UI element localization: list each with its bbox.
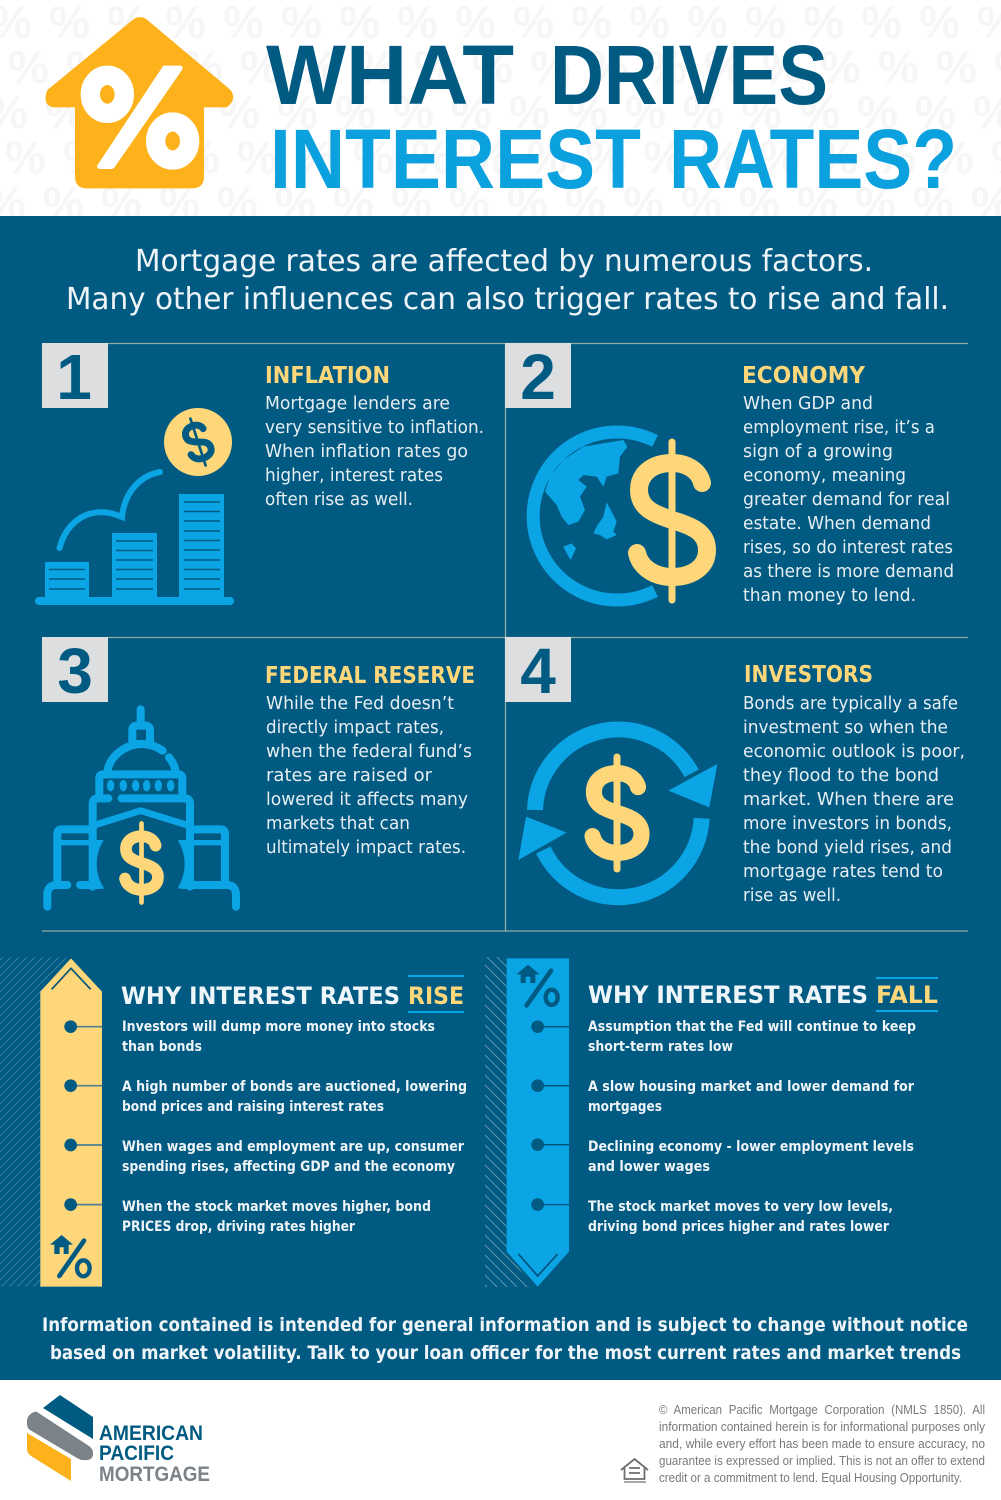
logo: American Pacific Mortgage: AMERICAN — [99, 1422, 203, 1445]
text: economy: as there is more demand — [743, 562, 954, 582]
number badge 2 — [505, 341, 571, 413]
heading: federal reserve: FEDERAL RESERVE — [265, 663, 475, 689]
text: economy: estate. When demand — [743, 514, 931, 534]
heading: why rates rise — [121, 976, 464, 1012]
text: economy: employment rise, it’s a — [743, 418, 935, 438]
text: federal reserve: lowered it affects many — [266, 790, 468, 810]
down arrow — [507, 958, 569, 1287]
panel: 1 inflation — [35, 341, 484, 605]
list: reasons rates rise: Investors will dump more money into stocks — [122, 1019, 435, 1035]
title: DRIVES — [550, 28, 828, 122]
logo: American Pacific Mortgage: MORTGAGE — [99, 1463, 210, 1486]
text: inflation: very sensitive to inflation. — [265, 418, 484, 438]
list: reasons rates rise: bond prices and raising interest rates — [122, 1099, 384, 1115]
text: inflation: higher, interest rates — [265, 466, 443, 486]
text: investors — [743, 694, 965, 906]
text: economy: sign of a growing — [743, 442, 893, 462]
title: RATES? — [669, 112, 957, 206]
panel: why rates rise — [0, 957, 467, 1287]
text: investors: economic outlook is poor, — [743, 742, 965, 762]
list: reasons rates fall: The stock market moves to very low levels, — [588, 1199, 893, 1215]
list: reasons rates fall: and lower wages — [588, 1159, 710, 1175]
icon: circular arrows with dollar — [518, 729, 717, 897]
text: economy: greater demand for real — [743, 490, 950, 510]
icon: globe with dollar — [533, 432, 707, 600]
number badge 3 — [42, 635, 108, 707]
text: investors: investment so when the — [743, 718, 948, 738]
text: federal reserve: ultimately impact rates. — [266, 838, 466, 858]
list: reasons rates rise: than bonds — [122, 1039, 202, 1055]
intro text — [66, 244, 949, 317]
text: federal reserve — [266, 694, 472, 858]
text: federal reserve: when the federal fund’s — [266, 742, 472, 762]
legal disclaimer — [659, 1402, 985, 1485]
number badge 1: 1 — [56, 341, 92, 413]
list: reasons rates fall — [588, 1019, 916, 1235]
panel: why rates fall — [485, 957, 938, 1287]
text: investors: rise as well. — [743, 886, 841, 906]
heading: why rates fall: WHY INTEREST RATES — [588, 981, 868, 1009]
text: economy: rises, so do interest rates — [743, 538, 953, 558]
text: economy: When GDP and — [743, 394, 873, 414]
text: inflation — [265, 394, 484, 510]
icon: equal housing — [621, 1459, 648, 1483]
text: inflation: When inflation rates go — [265, 442, 468, 462]
text: investors: market. When there are — [743, 790, 954, 810]
text: investors: the bond yield rises, and — [743, 838, 952, 858]
number badge 2: 2 — [520, 341, 556, 413]
text: inflation: often rise as well. — [265, 490, 413, 510]
icon: capitol with dollar — [47, 709, 236, 908]
number badge 4: 4 — [520, 635, 556, 707]
main navy panel — [0, 216, 1001, 1380]
list: reasons rates rise: A high number of bonds are auctioned, lowering — [122, 1079, 467, 1095]
text: inflation: Mortgage lenders are — [265, 394, 450, 414]
heading: investors: INVESTORS — [744, 662, 873, 688]
list: reasons rates rise: When wages and employment are up, consumer — [122, 1139, 465, 1155]
text: investors: Bonds are typically a safe — [743, 694, 958, 714]
text: federal reserve: rates are raised or — [266, 766, 433, 786]
text: federal reserve: While the Fed doesn’t — [266, 694, 454, 714]
legal disclaimer: credit or a commitment to lend. Equal Housing Opportunity. — [659, 1470, 962, 1485]
list: reasons rates rise: spending rises, affecting GDP and the economy — [122, 1159, 455, 1175]
panel: 2 economy — [505, 341, 954, 606]
heading: inflation: INFLATION — [265, 363, 390, 389]
logo: American Pacific Mortgage — [27, 1395, 210, 1486]
text: federal reserve: markets that can — [266, 814, 410, 834]
heading: why rates rise: WHY INTEREST RATES — [121, 982, 400, 1010]
heading: why rates fall: FALL — [876, 981, 938, 1009]
number badge 3: 3 — [57, 635, 93, 707]
logo: American Pacific Mortgage: PACIFIC — [99, 1442, 174, 1465]
heading: economy: ECONOMY — [742, 363, 865, 389]
list: reasons rates fall: mortgages — [588, 1099, 662, 1115]
text: federal reserve: directly impact rates, — [266, 718, 444, 738]
up arrow — [40, 958, 102, 1287]
icon: bar chart with coin — [35, 408, 234, 605]
title: INTEREST — [270, 112, 641, 206]
number badge 4 — [505, 635, 571, 707]
text: investors: more investors in bonds, — [743, 814, 952, 834]
list: reasons rates rise: When the stock market moves higher, bond — [122, 1199, 431, 1215]
panel: 4 investors — [505, 635, 965, 906]
text: investors: mortgage rates tend to — [743, 862, 943, 882]
intro text: Mortgage rates are affected by numerous factors. — [135, 244, 873, 279]
list: reasons rates rise: PRICES drop, driving rates higher — [122, 1219, 356, 1235]
icon: house with percent sign — [45, 17, 233, 188]
list: reasons rates fall: Assumption that the Fed will continue to keep — [588, 1019, 916, 1035]
text: investors: they flood to the bond — [743, 766, 939, 786]
list: reasons rates fall: driving bond prices higher and rates lower — [588, 1219, 890, 1235]
text: economy: than money to lend. — [743, 586, 916, 606]
intro text: Many other influences can also trigger rates to rise and fall. — [66, 282, 949, 317]
number badge 1 — [42, 341, 108, 413]
text: economy — [743, 394, 954, 606]
heading: why rates rise: RISE — [408, 982, 464, 1010]
list: reasons rates fall: A slow housing market and lower demand for — [588, 1079, 915, 1095]
text: economy: economy, meaning — [743, 466, 906, 486]
list: reasons rates fall: Declining economy - lower employment levels — [588, 1139, 914, 1155]
title: WHAT — [266, 28, 514, 122]
list: reasons rates rise — [122, 1019, 467, 1235]
footer note — [42, 1314, 968, 1364]
title — [266, 28, 957, 206]
panel: 3 federal reserve — [42, 635, 475, 908]
list: reasons rates fall: short-term rates low — [588, 1039, 733, 1055]
